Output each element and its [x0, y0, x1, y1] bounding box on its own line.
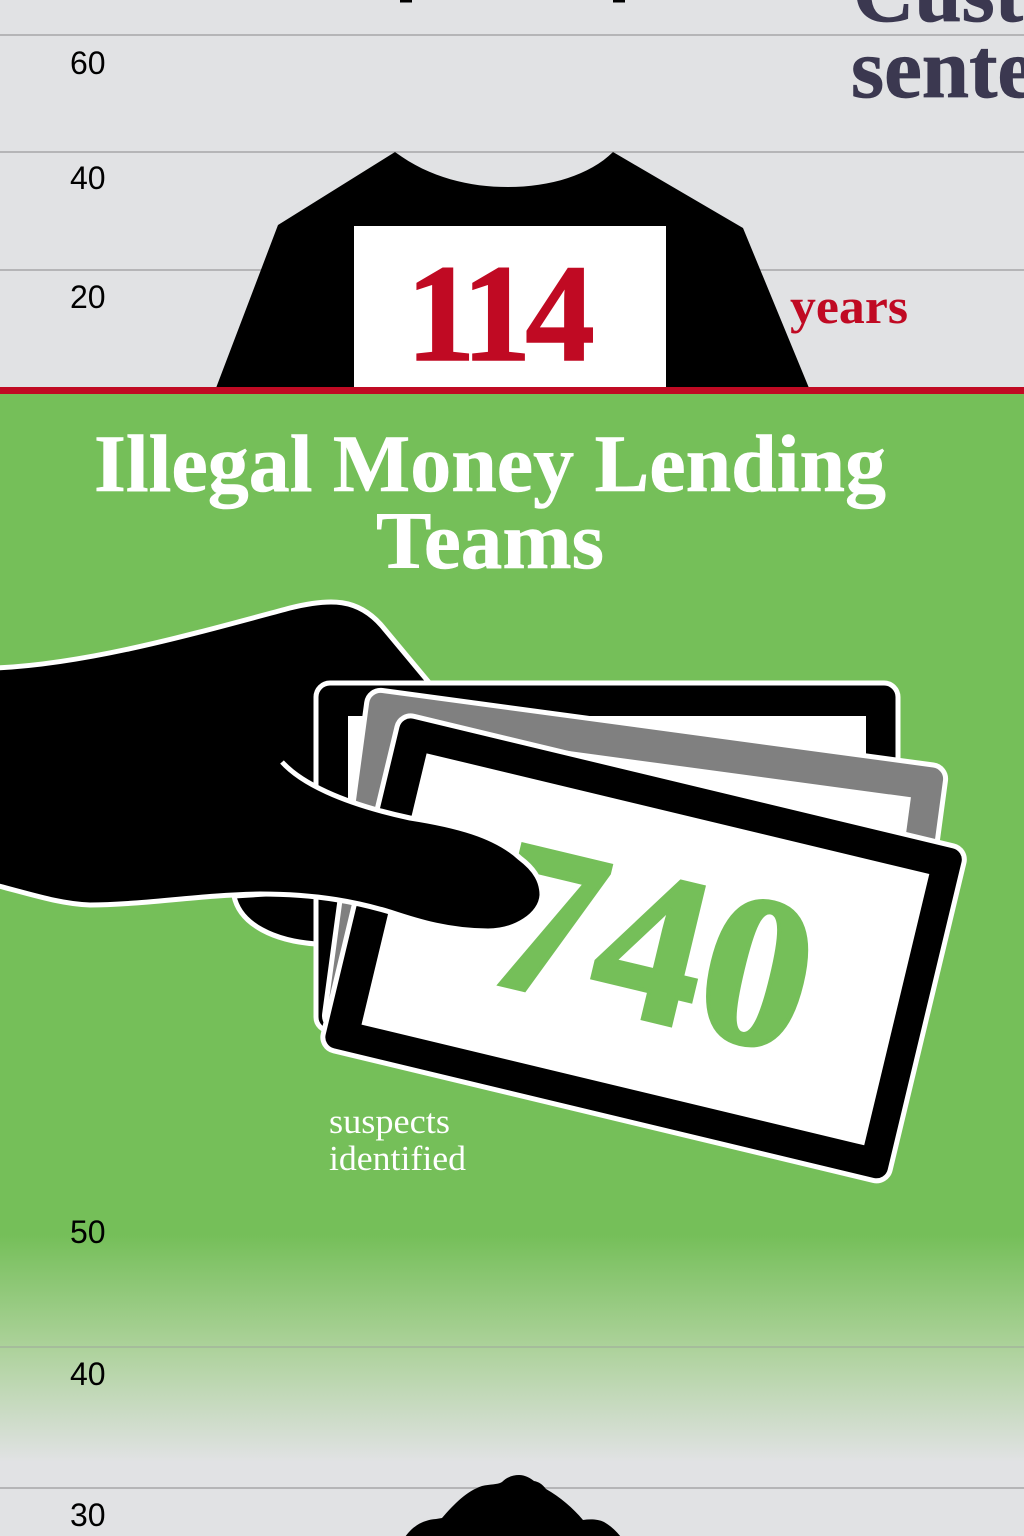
- number: 740 suspects: 740: [467, 792, 838, 1100]
- heading: illegal money lending teams: Illegal Money Lending: [94, 418, 886, 509]
- heading: illegal money lending teams: [94, 418, 886, 586]
- top panel: custodial sentences: [70, 0, 1024, 391]
- icon: hand holding banknotes: [0, 602, 967, 1184]
- palm under fingers: [234, 890, 330, 944]
- axis labels: 40: [70, 160, 106, 196]
- axis labels: 50: [70, 1214, 106, 1250]
- label: suspects identified: suspects: [329, 1102, 450, 1141]
- axis labels: 30: [70, 1497, 106, 1533]
- axis labels: 60: [70, 45, 106, 81]
- heading: illegal money lending teams: Teams: [376, 495, 604, 586]
- label: suspects identified: [329, 1102, 467, 1178]
- axis labels: [70, 1214, 106, 1533]
- axis labels: 40: [70, 1356, 106, 1392]
- label: suspects identified: identified: [329, 1139, 467, 1178]
- axis labels: [70, 45, 106, 315]
- hand back: [0, 602, 432, 880]
- clipped marks from the section above: [400, 0, 625, 2]
- sentence number tag: 114: [406, 237, 592, 391]
- icon: prisoner t-shirt: [216, 152, 809, 388]
- panel: illegal money lending teams: [0, 387, 1024, 1465]
- banknote: back: [316, 683, 898, 1031]
- sentence number tag: [354, 226, 666, 391]
- thumb: [0, 700, 542, 931]
- unit label: years: years: [790, 278, 908, 334]
- icon: head silhouette (cropped): [405, 1475, 621, 1536]
- banknote: middle: [323, 689, 947, 1106]
- green panel background: [0, 390, 1024, 1465]
- axis labels: 20: [70, 279, 106, 315]
- banknote: front: [320, 713, 967, 1184]
